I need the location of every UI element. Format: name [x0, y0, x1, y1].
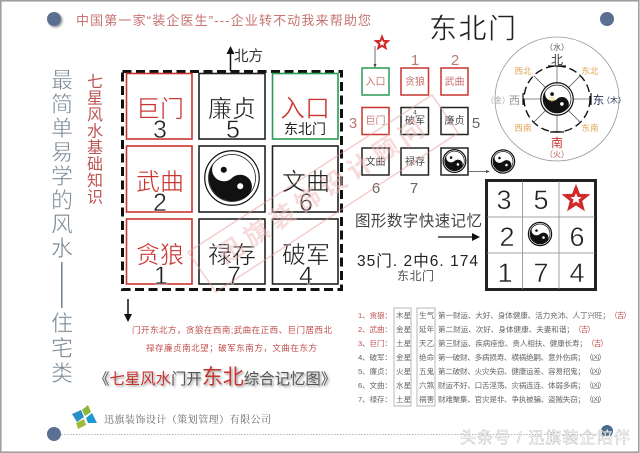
decorative dot top left [47, 12, 61, 26]
cell: 武曲: 武曲 [136, 169, 184, 196]
top slogan: 中国第一家“装企医生”---企业转不动我来帮助您 [76, 13, 371, 28]
side heading: 七星风水基础知识: 础 [87, 156, 103, 174]
row 7: 祸害 [419, 394, 435, 404]
centre mark: 中 [549, 96, 555, 104]
compass labels: （木） [602, 95, 626, 105]
arrow star to entrance [374, 46, 376, 68]
row 2: 2、武曲： [358, 324, 392, 334]
row 2 [358, 324, 595, 334]
row 7: 土星 [396, 394, 412, 404]
row 3 [358, 338, 608, 348]
left vertical title: 的 [51, 188, 73, 213]
cell: 破军 [272, 219, 338, 290]
memory grid: 6 [569, 222, 585, 252]
cell: 文曲: 6 [299, 189, 313, 217]
dotted rule [61, 434, 600, 436]
mini grid numbers: 5 [472, 115, 480, 132]
cell: 武曲: 2 [153, 189, 167, 217]
mnemonic line 2: 禄存廉贞南北望；破军东南方，文曲在东方 [146, 343, 317, 353]
mini grid numbers: 2 [451, 52, 459, 69]
memory grid: 1 [497, 258, 513, 288]
mini: 入口: 入口 [366, 77, 386, 88]
stamp watermark: 迅旗装饰设计顾问 [213, 115, 430, 269]
cell: 贪狼 [126, 219, 192, 290]
row 3: 天乙 [419, 339, 435, 348]
mini grid of stars [362, 68, 468, 175]
left vertical title: 学 [51, 164, 73, 189]
memory grid: 5 [533, 185, 549, 215]
arrow to tai chi [468, 170, 490, 173]
compass labels: （金） [486, 95, 510, 105]
left vertical title: 风 [51, 212, 73, 237]
row 3: 土星 [396, 338, 412, 348]
mini grid numbers [349, 52, 480, 197]
cell: 破军: 4 [299, 262, 313, 290]
cell: 入口 东北门 [272, 74, 338, 139]
north arrow with label: 北方 [234, 48, 263, 65]
side heading: 七星风水基础知识 [87, 73, 103, 206]
left vertical title: 类 [51, 361, 73, 386]
platform watermark: 头条号 / 迅旗装企陪伴 [460, 429, 630, 447]
compass labels: 东北 [581, 66, 599, 76]
cell: 破军: 破军 [282, 242, 330, 269]
cell: 禄存: 禄存 [208, 242, 256, 269]
compass labels: 东南 [581, 123, 599, 133]
cell: 贪狼: 1 [154, 262, 168, 290]
row 5: 五鬼 [419, 366, 435, 376]
cell: 文曲 [272, 146, 338, 217]
compass labels: 西南 [514, 123, 532, 133]
row 3: 3、巨门： [358, 338, 392, 348]
row 5 [358, 366, 606, 376]
row 6: 财运不好、口舌淫荡、灾祸连连、体弱多病； [438, 380, 585, 390]
memory formula: 35门. 2中6. 174 [357, 252, 478, 270]
row 5: 第二破财、火灾失窃、健康运差、容易招鬼； [438, 366, 585, 376]
row 1: 生气 [419, 310, 435, 320]
cell: 巨门: 3 [153, 116, 167, 144]
compass labels: 西 [509, 95, 520, 107]
grid star [566, 188, 586, 208]
row 4 [358, 352, 606, 362]
compass labels: 北 [551, 53, 563, 67]
bottom left dot [47, 427, 61, 441]
memory grid: 4 [569, 258, 585, 288]
logo [72, 405, 97, 429]
mini: 廉贞: 廉贞 [444, 114, 464, 127]
mini: 贪狼: 贪狼 [405, 75, 425, 88]
row 3: 第三财运、疾病痊愈、贵人相扶、健康长寿； [438, 338, 587, 348]
row 1 [358, 310, 631, 320]
mini: 武曲: 武曲 [444, 75, 464, 88]
row 7: 7、禄存： [358, 394, 392, 404]
grid tai chi [528, 222, 552, 246]
mini: 破军 [401, 108, 428, 134]
left vertical title: 单 [51, 116, 73, 141]
side heading: 七星风水基础知识: 基 [87, 139, 103, 157]
mnemonic line 1: 门开东北方，贪狼在西南;武曲在正西、巨门居西北 [132, 325, 332, 335]
decorative dot top right [600, 12, 614, 26]
row 2: 金星 [396, 324, 412, 334]
row 4: 第一破财、多病损寿、横祸绝嗣、意外伤病； [438, 352, 585, 362]
row 1: 木星 [396, 310, 412, 320]
side heading: 七星风水基础知识: 水 [87, 122, 103, 140]
row 1: 第一财运、大好、身体健康、活力充沛、人丁兴旺； [438, 310, 610, 320]
row 4: 金星 [396, 352, 412, 362]
memory grid [486, 180, 596, 290]
cell: 廉贞: 5 [226, 116, 240, 144]
left vertical title: 宅 [51, 336, 73, 361]
cell: 巨门 [126, 74, 192, 144]
memory caption: 图形数字快速记忆 [355, 212, 482, 230]
north arrow with label [226, 46, 263, 71]
row 1: （吉） [610, 311, 631, 320]
cell: 禄存 [199, 219, 265, 290]
cell: 贪狼: 贪狼 [136, 242, 184, 269]
left vertical title: 水 [51, 236, 73, 261]
compass labels: 东 [593, 94, 604, 107]
left vertical title: 住 [51, 311, 73, 336]
cell: 巨门: 巨门 [136, 96, 184, 123]
cell: 入口 东北门: 入口 [280, 95, 330, 123]
main title: 东北门: 东北门 [429, 13, 516, 44]
formula sublabel: 东北门 [397, 268, 434, 283]
row 5: （凶） [585, 367, 606, 376]
main nine-palace grid [122, 72, 342, 290]
memory grid: 3 [496, 185, 512, 215]
down arrow [124, 299, 132, 322]
star table [358, 308, 631, 406]
tai chi icon [491, 150, 515, 173]
cell: 廉贞: 廉贞 [208, 96, 256, 123]
row 5: 5、廉贞： [358, 366, 392, 376]
arrow to memory grid [438, 233, 480, 241]
compass labels: （水） [545, 42, 569, 52]
avatar blob [601, 425, 613, 437]
row 1: 1、贪狼： [358, 310, 392, 320]
mini: 巨门: 巨门 [366, 114, 386, 127]
side heading: 七星风水基础知识: 风 [87, 107, 103, 124]
compass labels: 西北 [514, 66, 532, 76]
cell: 廉贞 [199, 74, 265, 144]
mini: 破军: 4 [413, 110, 417, 116]
diagram caption: 《七星风水门开东北综合记忆图》 [94, 366, 336, 389]
cell: tai chi [199, 146, 265, 212]
side heading: 七星风水基础知识: 识 [87, 188, 103, 206]
row 2: 延年 [419, 324, 435, 334]
row 6 [358, 380, 606, 390]
cell: 武曲 [126, 146, 192, 217]
row 6: 水星 [396, 380, 412, 390]
mini grid numbers: 7 [410, 180, 418, 197]
memory grid: 2 [499, 222, 515, 252]
row 4: （凶） [585, 353, 606, 362]
compass labels: （火） [545, 150, 569, 159]
row 3: （吉） [587, 339, 608, 348]
compass diagram [486, 37, 626, 161]
memory grid: 7 [533, 258, 549, 288]
mini grid numbers: 3 [349, 115, 357, 132]
company name: 迅旗装饰设计（策划管理）有限公司 [104, 413, 271, 426]
compass labels [486, 42, 626, 159]
row 2: 第二财运、次好、身体健康、夫妻和谐； [438, 324, 574, 334]
side heading: 七星风水基础知识: 七 [87, 73, 103, 91]
row 4: 4、破军： [358, 352, 392, 362]
row 6: （凶） [585, 381, 606, 390]
mini: 文曲: 文曲 [366, 155, 386, 168]
mini grid numbers: 1 [411, 52, 419, 69]
stamp watermark [188, 95, 458, 292]
left vertical title: 最 [51, 68, 73, 93]
star above entrance [376, 37, 388, 48]
row 7: 财难聚集、官灾是非、争执被骗、盗贼失窃； [438, 394, 585, 404]
left vertical title: 简 [51, 92, 73, 117]
cell: 禄存: 7 [227, 262, 241, 290]
cell: 文曲: 文曲 [282, 169, 330, 196]
compass labels: 南 [551, 135, 563, 150]
row 4: 绝命 [419, 352, 435, 362]
mini: 禄存: 禄存 [405, 155, 425, 168]
row 7: （凶） [585, 395, 606, 404]
left vertical title: 易 [51, 140, 73, 165]
compass tai chi [541, 83, 573, 115]
row 7 [358, 394, 606, 404]
left vertical title [51, 68, 73, 386]
row 6: 6、文曲： [358, 380, 392, 390]
row 5: 火星 [396, 367, 412, 376]
row 6: 六煞 [419, 380, 435, 390]
row 2: （吉） [574, 325, 595, 334]
mini: 破军: 破军 [405, 114, 425, 127]
side heading: 七星风水基础知识: 知 [87, 172, 103, 190]
cell: 入口 东北门: 东北门 [284, 121, 326, 137]
mini grid numbers: 6 [372, 180, 380, 197]
side heading: 七星风水基础知识: 星 [87, 90, 103, 108]
mini: tai chi [441, 148, 468, 175]
